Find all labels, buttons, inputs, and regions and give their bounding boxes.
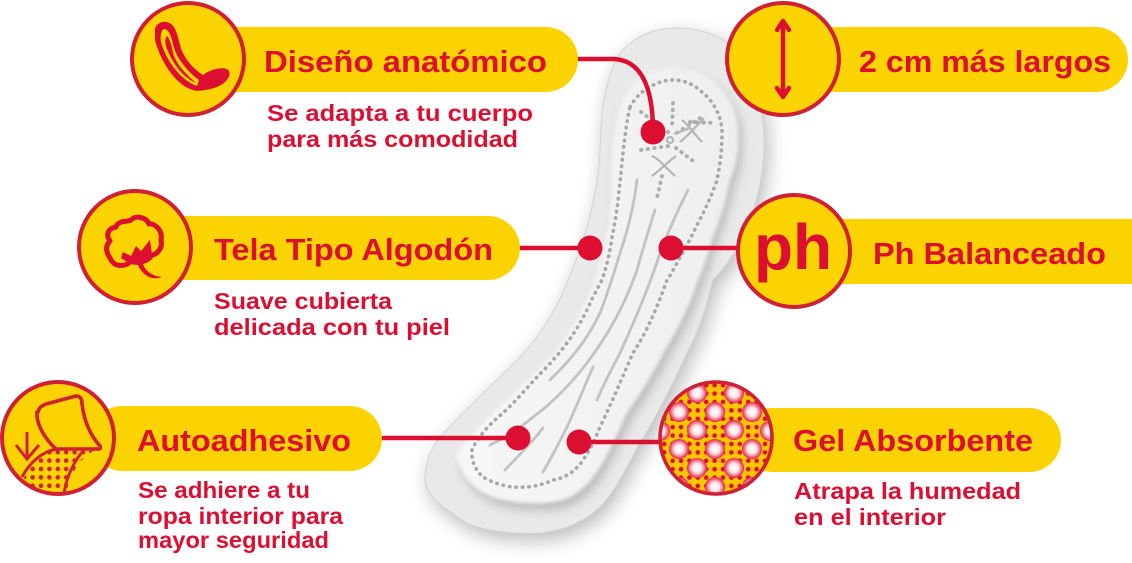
embossed channel lines	[490, 180, 688, 472]
connector: Ph Balanceado	[671, 246, 738, 250]
icon: gel texture	[658, 380, 774, 496]
heading: Ph Balanceado	[873, 236, 1106, 271]
icon: anatomical pad	[155, 22, 230, 91]
heading: Gel Absorbente	[793, 423, 1033, 458]
description: Atrapa la humedad	[794, 478, 1021, 504]
marker dot: Diseño anatómico	[640, 120, 666, 144]
connector: Autoadhesivo	[382, 436, 518, 440]
description line 3: mayor seguridad	[138, 527, 329, 553]
panel: Tela Tipo Algodón	[79, 191, 520, 340]
marker dot: Tela Tipo Algodón	[578, 236, 602, 260]
description line 2: ropa interior para	[138, 503, 344, 529]
panel: Gel Absorbente	[650, 381, 1061, 530]
marker dot: Gel Absorbente	[566, 430, 592, 454]
panel: Ph Balanceado	[738, 195, 1132, 307]
connector: Gel Absorbente	[579, 440, 660, 444]
description: Se adhiere a tu	[138, 477, 310, 503]
marker dot: Ph Balanceado	[658, 236, 684, 260]
icon: cotton flower	[107, 217, 162, 278]
heading: Autoadhesivo	[137, 423, 351, 458]
heading: 2 cm más largos	[859, 44, 1111, 79]
icon: double arrow	[777, 21, 789, 97]
connector: Tela Tipo Algodón	[517, 246, 590, 250]
connector: Diseño anatómico	[578, 59, 653, 132]
embossed dotted stitching	[472, 80, 722, 487]
marker dot: Autoadhesivo	[506, 426, 530, 450]
icon: adhesive backing	[16, 396, 100, 495]
description line 2: en el interior	[794, 504, 946, 530]
panel: Diseño anatómico	[132, 3, 578, 152]
description line 2: delicada con tu piel	[214, 314, 450, 340]
heading: Diseño anatómico	[264, 44, 547, 79]
product: sanitary pad	[425, 28, 768, 540]
embossed flower pattern	[641, 103, 716, 198]
description: Se adapta a tu cuerpo	[267, 100, 533, 126]
description line 2: para más comodidad	[267, 126, 518, 152]
panel: 2 cm más largos	[727, 3, 1128, 115]
icon: ph: ph	[754, 211, 832, 283]
panel: Autoadhesivo	[2, 382, 382, 553]
description: Suave cubierta	[214, 288, 393, 314]
heading: Tela Tipo Algodón	[214, 232, 493, 267]
